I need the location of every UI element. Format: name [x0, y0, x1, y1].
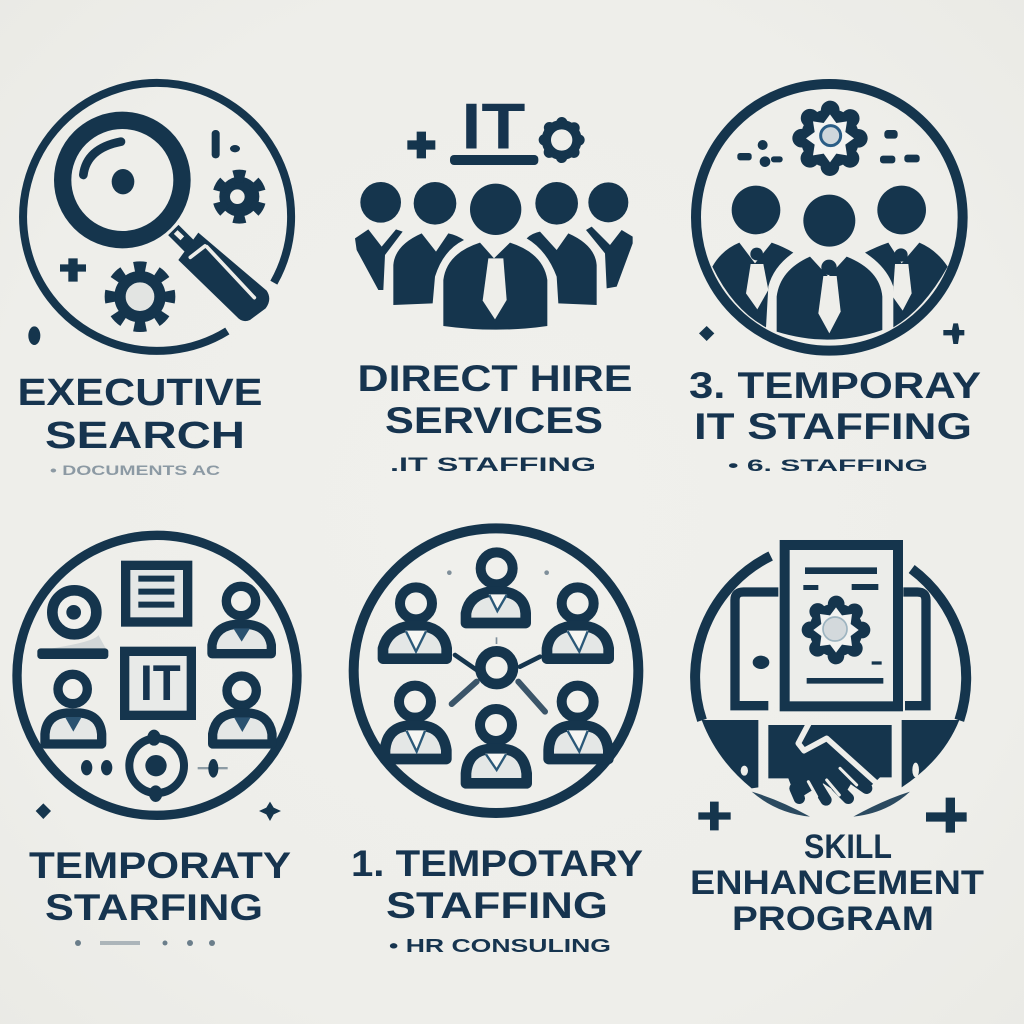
dashes	[737, 130, 920, 167]
icons group	[17, 535, 297, 821]
gear upper	[219, 176, 260, 217]
document	[785, 545, 898, 706]
caption: • DOCUMENTS AC	[50, 462, 220, 478]
IT box	[125, 651, 191, 715]
gear	[544, 123, 579, 157]
circle outline	[696, 84, 963, 351]
caption dots	[75, 940, 215, 946]
person middle left	[45, 674, 102, 744]
person top	[466, 552, 526, 623]
cycle icon	[129, 730, 184, 802]
heading: 1. TEMPOTARY	[351, 843, 643, 884]
network hub	[480, 651, 513, 684]
panel: direct hire	[355, 89, 633, 476]
panel: temporary IT staffing: IT STAFFING	[694, 406, 972, 447]
person lower right	[549, 686, 608, 759]
dots	[36, 759, 281, 821]
magnifying glass	[63, 120, 269, 321]
back tablet	[735, 592, 926, 706]
person middle right	[213, 676, 272, 744]
dots	[447, 570, 549, 644]
panel: network staffing: STAFFING	[386, 885, 608, 926]
person top right	[212, 586, 271, 654]
network links	[452, 655, 545, 712]
panel: temporary IT staffing	[689, 84, 981, 475]
people	[712, 186, 948, 340]
panel: network staffing	[351, 528, 643, 956]
plus	[407, 132, 435, 158]
person bottom	[466, 709, 527, 783]
gear	[801, 109, 859, 168]
underline	[450, 155, 538, 165]
gear lower	[110, 267, 170, 327]
gear	[809, 603, 863, 657]
direct hire icon group	[355, 89, 633, 330]
panel: skill enhancement	[690, 545, 984, 938]
person upper left	[383, 587, 447, 659]
people group	[355, 182, 633, 330]
marks	[698, 798, 967, 833]
tablet dot	[753, 656, 769, 669]
heading: 3. TEMPORAY	[689, 365, 981, 406]
heading: EXECUTIVE	[18, 372, 262, 414]
webcam icon	[37, 590, 108, 659]
marks	[699, 323, 964, 344]
caption: .IT STAFFING	[390, 455, 596, 476]
heading: SKILL	[804, 828, 892, 866]
caption: • HR CONSULING	[389, 936, 611, 956]
person lower left	[385, 686, 446, 759]
heading: TEMPORATY	[29, 845, 291, 886]
panel: direct hire: SERVICES	[385, 400, 603, 441]
circle outline	[354, 528, 638, 813]
IT box: IT	[140, 655, 181, 711]
circle arcs	[695, 556, 966, 720]
circle outline	[23, 83, 291, 351]
panel: temporary staffing: STARFING	[45, 887, 263, 928]
person upper right	[547, 587, 609, 659]
search icon group	[23, 83, 291, 351]
IT mark: IT	[461, 89, 525, 162]
panel: skill enhancement: ENHANCEMENT	[690, 864, 984, 902]
circle outline	[17, 535, 297, 815]
heading: DIRECT HIRE	[358, 358, 632, 399]
panel: executive search	[18, 83, 291, 478]
small marks	[28, 130, 240, 345]
network icons group	[354, 528, 638, 813]
panel: temporary staffing	[17, 535, 297, 946]
panel: executive search: SEARCH	[45, 415, 245, 457]
caption: • 6. STAFFING	[728, 456, 928, 475]
team icon group	[696, 84, 964, 351]
skill icon group	[695, 545, 967, 833]
panel: skill enhancement: PROGRAM	[732, 900, 934, 938]
document icon	[126, 565, 188, 622]
handshake	[702, 720, 959, 817]
